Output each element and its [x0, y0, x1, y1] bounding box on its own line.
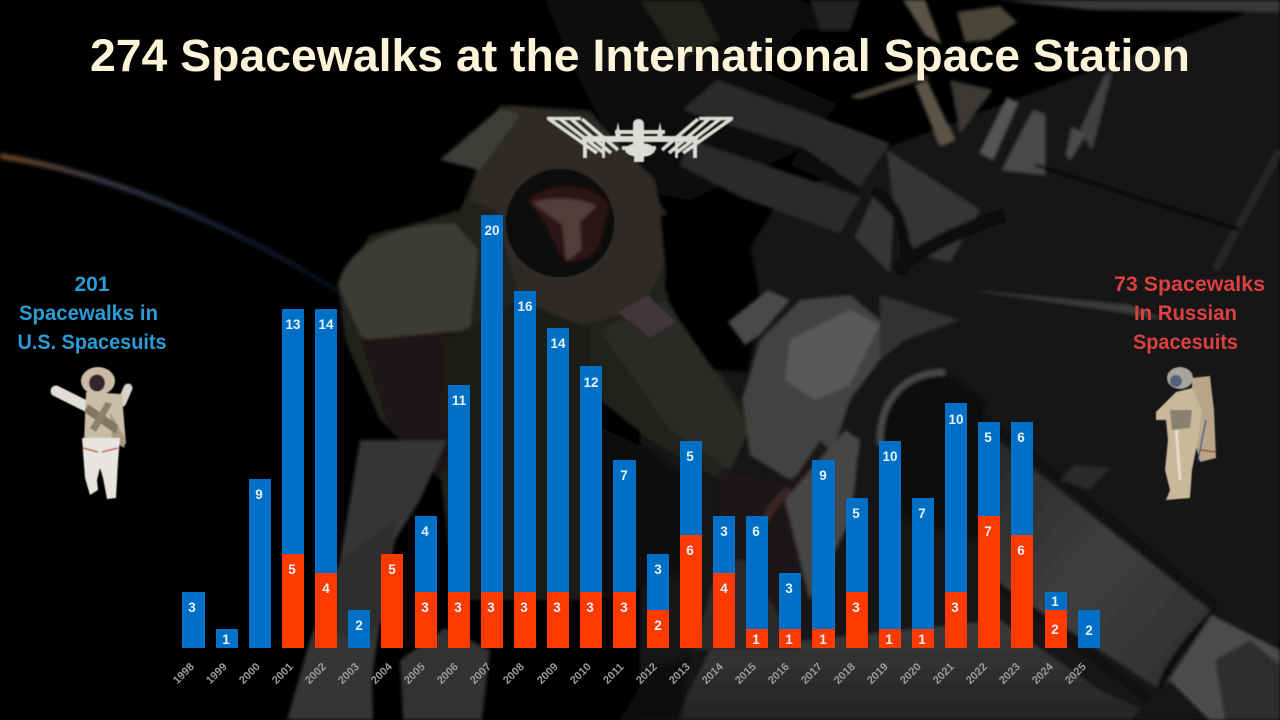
callout: Russian spacesuit total: Spacesuits	[1133, 331, 1238, 354]
bar 2005	[415, 516, 437, 648]
bar 2023: 6	[1017, 430, 1025, 445]
bar 2007	[481, 215, 503, 648]
bar 2016: 1	[785, 632, 793, 647]
callout: Russian spacesuit total: In Russian	[1134, 302, 1237, 325]
x-axis year labels: 2009	[535, 661, 561, 687]
bar 2002	[315, 309, 337, 648]
bar 1999	[216, 629, 238, 648]
stacked bar chart: spacewalks per year	[182, 215, 1100, 648]
bar 2019: 1	[885, 632, 893, 647]
x-axis year labels: 2007	[468, 661, 494, 687]
bar 2017: 9	[819, 468, 827, 483]
x-axis year labels: 2017	[799, 661, 825, 687]
bar 2001: 5	[288, 562, 296, 577]
bar 2003: 2	[355, 618, 363, 633]
bar 2007: 3	[487, 600, 495, 615]
debris and insulation near glove	[720, 290, 960, 620]
bar 2015	[746, 516, 768, 648]
bar 2009: 3	[553, 600, 561, 615]
x-axis year labels: 2002	[303, 661, 329, 687]
callout: Russian spacesuit total: 73 Spacewalks	[1114, 273, 1265, 296]
bar 2014: 4	[720, 581, 728, 596]
x-axis year labels: 2011	[601, 661, 627, 687]
icon: astronaut in Russian spacesuit	[1156, 367, 1216, 500]
x-axis year labels: 2012	[634, 661, 660, 687]
bar 2020: 1	[918, 632, 926, 647]
bar 2018	[846, 498, 868, 648]
bar 2017	[812, 460, 835, 648]
bar 2024: 2	[1051, 622, 1059, 637]
bar 2015: 6	[752, 524, 760, 539]
ring and cylinder lower right	[675, 372, 1280, 720]
bar 2014: 3	[720, 524, 728, 539]
bar 2020: 7	[918, 506, 926, 521]
bar 1999: 1	[222, 632, 230, 647]
callout: U.S. spacesuit total: 201	[74, 273, 110, 296]
earth limb glow	[0, 156, 345, 296]
bar 2014	[713, 516, 735, 648]
bar 2000: 9	[255, 487, 263, 502]
x-axis year labels: 2003	[336, 661, 362, 687]
bar 2012: 2	[654, 618, 662, 633]
x-axis year labels: 2015	[733, 661, 759, 687]
x-axis year labels: 2018	[832, 661, 858, 687]
bar 2008: 3	[520, 600, 528, 615]
bar 2011	[613, 460, 636, 648]
x-axis year labels: 2022	[964, 661, 990, 687]
bar 2018: 5	[852, 506, 860, 521]
x-axis year labels: 2008	[501, 661, 527, 687]
bar 2025: 2	[1085, 623, 1093, 638]
bar 2013	[680, 441, 702, 648]
bar 2008: 16	[517, 299, 533, 314]
x-axis year labels: 2013	[667, 661, 693, 687]
x-axis year labels: 2023	[997, 661, 1023, 687]
x-axis year labels: 2021	[931, 661, 957, 687]
bar 2016	[779, 573, 801, 648]
bar 2001	[282, 309, 304, 648]
station backdrop right side	[545, 0, 1280, 720]
bar 2022: 7	[984, 524, 992, 539]
astronaut body	[338, 105, 760, 600]
x-axis year labels: 2001	[270, 661, 296, 687]
icon: astronaut in U.S. spacesuit	[56, 367, 128, 499]
astronaut legs	[287, 440, 690, 720]
bar 2009	[547, 328, 569, 648]
x-axis year labels: 2020	[898, 661, 924, 687]
bar 1998	[182, 592, 205, 648]
bar 2022: 5	[984, 430, 992, 445]
bar 2003	[348, 610, 370, 648]
bar 2007: 20	[484, 223, 500, 238]
callout: Russian spacesuit total	[1114, 273, 1265, 354]
bar 2020	[912, 498, 934, 648]
x-axis year labels: 2006	[435, 661, 461, 687]
bar 2008	[514, 291, 536, 648]
bar 2001: 13	[285, 317, 301, 332]
x-axis year labels: 2016	[766, 661, 792, 687]
bar 2004	[381, 554, 403, 648]
bar 2021	[945, 403, 967, 648]
bar 2019	[879, 441, 901, 648]
callout: U.S. spacesuit total: U.S. Spacesuits	[18, 331, 166, 354]
callout: U.S. spacesuit total: Spacewalks in	[19, 302, 158, 325]
bar 2017: 1	[819, 632, 827, 647]
x-axis year labels	[171, 660, 1089, 687]
bar 2016: 3	[785, 581, 793, 596]
flag patch	[618, 295, 676, 338]
bar 2021: 10	[948, 412, 964, 427]
bar 2010: 12	[583, 375, 599, 390]
x-axis year labels: 2024	[1030, 660, 1056, 687]
bar 2024: 1	[1051, 594, 1059, 609]
bar 2005: 4	[421, 524, 429, 539]
bar 2023	[1011, 422, 1033, 648]
x-axis year labels: 1999	[204, 661, 230, 687]
x-axis year labels: 2025	[1063, 661, 1089, 687]
astronaut visor	[506, 169, 614, 277]
bar 2004: 5	[388, 562, 396, 577]
bar 2000	[249, 479, 271, 648]
bar 2010: 3	[586, 600, 594, 615]
title: 274 Spacewalks at the International Space Station	[90, 30, 1190, 81]
bar 2010	[580, 366, 602, 648]
bar 2024	[1045, 592, 1067, 648]
x-axis year labels: 1998	[171, 661, 197, 687]
bar 2002: 14	[318, 317, 334, 332]
x-axis year labels: 2004	[369, 660, 395, 687]
bar 2012: 3	[654, 562, 662, 577]
bar 2002: 4	[322, 581, 330, 596]
bar 2022	[978, 422, 1000, 648]
bar 2018: 3	[852, 600, 860, 615]
bar 2012	[647, 554, 669, 648]
bar 2019: 10	[882, 449, 898, 464]
bar 2021: 3	[951, 600, 959, 615]
bar 2011: 7	[620, 468, 628, 483]
x-axis year labels: 2014	[700, 660, 726, 687]
bar 2023: 6	[1017, 543, 1025, 558]
bar 2011: 3	[620, 600, 628, 615]
bar 2006: 3	[454, 600, 462, 615]
bar 2009: 14	[550, 336, 566, 351]
bar 2005: 3	[421, 600, 429, 615]
x-axis year labels: 2005	[402, 661, 428, 687]
bar 2013: 5	[686, 449, 694, 464]
x-axis year labels: 2010	[568, 661, 594, 687]
bar 2015: 1	[752, 632, 760, 647]
x-axis year labels: 2000	[237, 661, 263, 687]
callout: U.S. spacesuit total	[18, 273, 166, 354]
bar 1998: 3	[188, 600, 196, 615]
bar 2013: 6	[686, 543, 694, 558]
bar 2006	[448, 385, 470, 648]
bar 2025	[1078, 610, 1100, 648]
icon: International Space Station silhouette	[547, 118, 733, 162]
bar 2006: 11	[452, 393, 467, 408]
x-axis year labels: 2019	[865, 661, 891, 687]
